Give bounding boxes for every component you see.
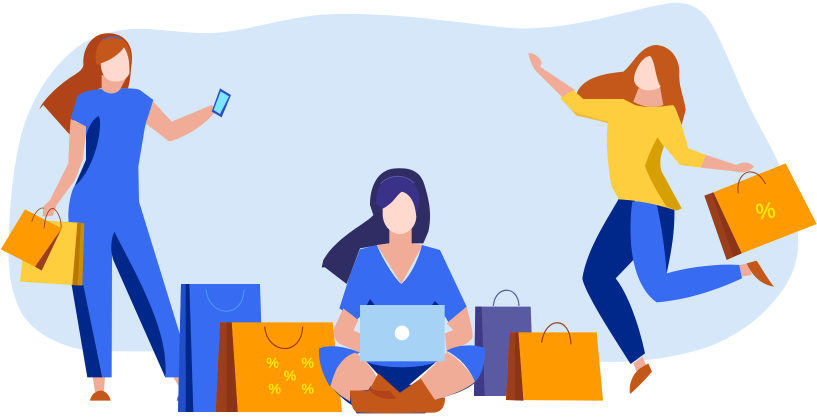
shirt fold bbox=[645, 137, 682, 211]
orange hand bag bbox=[1, 208, 62, 271]
percent sign: % bbox=[754, 197, 777, 225]
phone bbox=[212, 88, 231, 117]
left woman dark torso fold bbox=[75, 116, 100, 186]
large orange bag bbox=[216, 322, 342, 412]
yellow bag bbox=[20, 220, 84, 286]
jumping woman face bbox=[634, 56, 661, 90]
percent signs bbox=[266, 354, 314, 396]
jumping woman raised arm bbox=[528, 53, 575, 98]
orange bag right bbox=[506, 323, 603, 401]
jumping woman forearm bbox=[701, 155, 754, 172]
jumping woman neck bbox=[633, 87, 663, 107]
back trouser shade bbox=[655, 202, 674, 273]
seated woman boots bbox=[350, 373, 445, 413]
left woman legs skin bbox=[93, 377, 180, 392]
left woman hair back bbox=[39, 33, 132, 135]
percent signs: % bbox=[301, 354, 314, 370]
left woman neck bbox=[102, 75, 126, 93]
left woman left arm bbox=[43, 119, 86, 217]
seated woman pants lower bbox=[332, 383, 475, 413]
laptop gap highlights bbox=[353, 317, 453, 333]
center group bbox=[178, 168, 603, 413]
seated woman chest bbox=[377, 225, 423, 284]
purple bag bbox=[474, 290, 534, 396]
left woman bbox=[1, 33, 231, 401]
laptop bbox=[360, 299, 445, 367]
seated woman shirt bbox=[339, 245, 467, 323]
face bbox=[383, 192, 416, 234]
left woman shoe bbox=[90, 391, 182, 401]
percent signs: % bbox=[301, 380, 314, 396]
seated woman arms bbox=[334, 307, 473, 353]
seated woman knees bbox=[319, 345, 485, 387]
seated woman headband bbox=[381, 176, 414, 184]
jumping woman blue leg bbox=[631, 201, 742, 302]
swinging orange bag bbox=[704, 163, 817, 260]
blue shopping bag bbox=[178, 284, 264, 412]
left woman headband bbox=[103, 37, 122, 40]
jumping woman bbox=[528, 45, 817, 394]
seated woman thighs bbox=[331, 353, 475, 402]
jumping woman hair bbox=[577, 45, 686, 125]
jumping woman shirt bbox=[560, 90, 706, 211]
left woman face bbox=[101, 47, 129, 81]
seated woman hair bbox=[322, 168, 430, 284]
percent signs: % bbox=[268, 380, 281, 396]
left woman right arm bbox=[146, 102, 217, 142]
left woman jumpsuit bbox=[68, 88, 182, 377]
jumping woman dark leg bbox=[582, 198, 645, 364]
jumping woman feet bbox=[630, 261, 774, 394]
left woman dark inner leg bbox=[111, 232, 166, 377]
left woman dark trouser leg bbox=[72, 285, 102, 377]
left woman hair front bbox=[96, 36, 132, 65]
seated woman fringe bbox=[370, 177, 419, 213]
percent signs: % bbox=[284, 368, 296, 384]
seated woman shorts bbox=[365, 360, 438, 393]
sleeve shade bbox=[560, 98, 608, 123]
percent signs: % bbox=[266, 354, 279, 370]
